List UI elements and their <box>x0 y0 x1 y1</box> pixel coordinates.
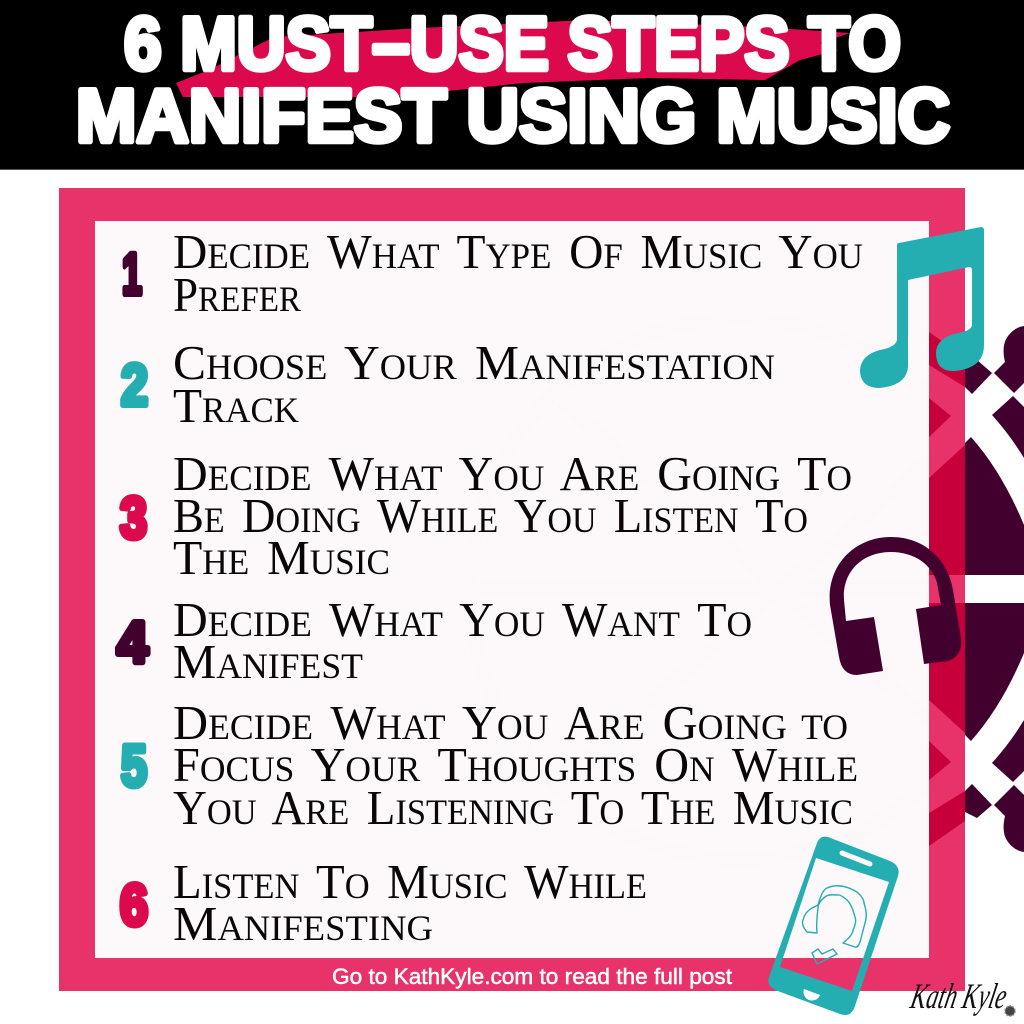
icon: small flower <box>1005 1006 1015 1016</box>
step 3: 3 <box>120 486 147 551</box>
step 5: FOCUS YOUR THOUGHTS ON WHILE <box>173 737 858 792</box>
step 4: MANIFEST <box>173 634 363 689</box>
decorative wheel: right side <box>929 326 1024 852</box>
step 4: DECIDE WHAT YOU WANT TO <box>173 592 752 647</box>
icon: smartphone <box>768 837 899 1015</box>
headset outline on screen <box>802 886 866 947</box>
step 2: 2 <box>121 353 148 418</box>
step 6: LISTEN TO MUSIC WHILE <box>173 854 647 909</box>
header banner <box>0 0 1024 170</box>
home button <box>803 989 820 1001</box>
step 3 <box>120 446 852 585</box>
title <box>76 2 950 158</box>
title: MANIFEST USING MUSIC <box>76 74 950 158</box>
step 1: PREFER <box>173 267 301 322</box>
brush stroke <box>176 20 850 97</box>
footer link text: Go to KathKyle.com to read the full post <box>332 964 732 989</box>
step 4 <box>117 592 752 689</box>
title: 6 MUST–USE STEPS TO <box>124 2 901 86</box>
step 5: DECIDE WHAT YOU ARE GOING TO <box>173 695 848 750</box>
step 5 <box>121 695 858 835</box>
check mark on screen <box>812 949 837 964</box>
step 1: 1 <box>122 242 142 307</box>
icon: headphones <box>830 537 961 675</box>
step 2: TRACK <box>173 378 299 433</box>
icon: music notes <box>860 227 984 388</box>
step 6 <box>120 854 647 951</box>
step 2: CHOOSE YOUR MANIFESTATION <box>173 335 775 390</box>
faint background wheel <box>470 319 1010 859</box>
step 6: MANIFESTING <box>173 896 433 951</box>
step 1 <box>122 224 863 322</box>
speaker slot <box>842 853 870 864</box>
step 4: 4 <box>117 610 148 675</box>
step 5: 5 <box>121 734 147 799</box>
step 3: DECIDE WHAT YOU ARE GOING TO <box>173 446 852 501</box>
step 6: 6 <box>120 873 148 938</box>
panel: steps frame <box>59 188 1010 991</box>
step 3: THE MUSIC <box>173 530 390 585</box>
step 1: DECIDE WHAT TYPE OF MUSIC YOU <box>173 224 863 279</box>
step 5: YOU ARE LISTENING TO THE MUSIC <box>173 780 853 835</box>
step 3: BE DOING WHILE YOU LISTEN TO <box>173 488 808 543</box>
step 2 <box>121 335 775 433</box>
